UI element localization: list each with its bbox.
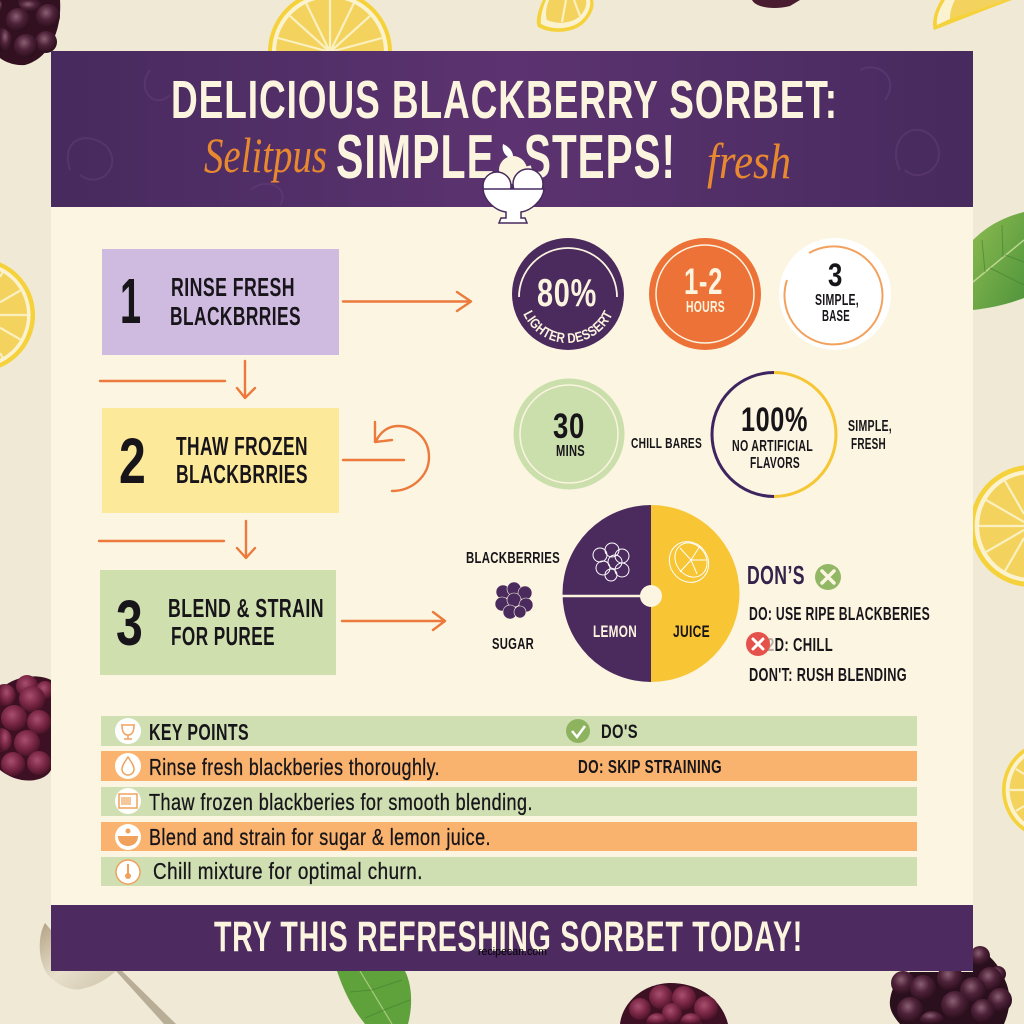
step 1 text line 1: RINSE FRESH	[171, 272, 295, 302]
step 3 text line 1: BLEND & STRAIN	[168, 593, 324, 623]
label: lemon: LEMON	[593, 622, 637, 641]
step 3	[100, 570, 336, 675]
stat: 80 percent: 80%	[537, 272, 597, 315]
label: juice: JUICE	[673, 622, 710, 641]
stat: 3 simple base: 3	[828, 257, 843, 293]
pie chart	[562, 505, 740, 682]
stat: 1-2 hours: 1-2	[684, 261, 723, 302]
arrow: step 1 down	[100, 361, 255, 398]
stat: 80 percent	[512, 238, 624, 350]
row: rinse	[101, 751, 917, 781]
stat: 1-2 hours	[649, 238, 761, 350]
stat: 3 simple base	[779, 238, 891, 350]
decoration: bottom blackberry	[620, 983, 728, 1024]
decoration: top right lemon wedge	[933, 0, 1012, 30]
stat: 100 percent: FLAVORS	[750, 455, 800, 472]
row: key points header: KEY POINTS	[149, 719, 249, 745]
label: sugar: SUGAR	[492, 636, 534, 653]
stat: 30 mins: MINS	[556, 443, 585, 460]
row: blend	[101, 822, 917, 851]
script word right: fresh	[707, 133, 791, 189]
row: rinse: Rinse fresh blackberies thoroughly.	[149, 754, 440, 780]
step 2	[102, 408, 339, 513]
icon: green cross	[815, 564, 841, 590]
icon: lemon outline	[661, 534, 717, 590]
label: simple fresh: FRESH	[851, 436, 886, 453]
step 1 number: 1	[120, 265, 142, 337]
stat: 1-2 hours: HOURS	[686, 299, 725, 316]
decoration: top lemon slice	[268, 0, 392, 52]
icon: blackberry	[495, 582, 533, 619]
item 2: 2D: CHILL	[767, 635, 833, 655]
decoration: lower right lemon slice	[1002, 749, 1024, 831]
decoration: left lemon slice	[0, 262, 35, 368]
script word left: Selitpus	[204, 127, 327, 183]
row: rinse: DO: SKIP STRAINING	[578, 757, 722, 777]
decoration: top blackberry	[752, 0, 800, 8]
row: thaw	[101, 787, 917, 816]
decoration: right mint leaf	[973, 212, 1024, 310]
icon: sorbet bowl	[483, 144, 544, 223]
heading: DON’S	[747, 560, 805, 590]
stat: 80 percent: LIGHTER DESSERT	[523, 310, 612, 343]
step 3 number: 3	[116, 587, 144, 659]
step 1 text line 2: BLACKBRRIES	[170, 301, 301, 331]
item 1: DO: USE RIPE BLACKBERIES	[749, 604, 930, 624]
stat: 30 mins	[514, 378, 624, 490]
don'ts panel	[746, 560, 930, 685]
decoration: bottom mint leaf	[337, 971, 411, 1024]
key points list	[101, 716, 917, 886]
step 2 text line 2: BLACKBRRIES	[176, 459, 308, 489]
arrow: step 2 loop	[343, 422, 429, 491]
stat: 30 mins: 30	[553, 407, 585, 446]
decoration: top left blackberry	[0, 0, 60, 65]
icon: red cross	[746, 632, 770, 656]
decoration: bottom right blackberry	[890, 946, 1012, 1024]
decoration: spoon	[40, 923, 176, 1024]
label: chill bares: CHILL BARES	[631, 435, 702, 452]
row: key points header	[101, 716, 917, 746]
title line 2 right: STEPS!	[524, 123, 676, 192]
arrow: step 1 to stats	[343, 292, 471, 311]
stat: 100 percent	[712, 372, 836, 496]
step 2 text line 1: THAW FROZEN	[176, 431, 308, 461]
row: blend: Blend and strain for sugar & lemon juice.	[149, 824, 491, 850]
decoration: left blackberry	[0, 675, 54, 781]
footer band	[51, 905, 973, 971]
stat: 100 percent: 100%	[741, 401, 808, 439]
arrow: step 3 to chart	[342, 612, 445, 630]
watermark: recipecan.com	[478, 946, 547, 958]
icon: berry outline	[593, 543, 629, 581]
title line 2 left: SIMPLE	[336, 123, 495, 192]
stat: 100 percent: NO ARTIFICIAL	[732, 438, 813, 455]
header band	[51, 51, 973, 207]
stat: 3 simple base: SIMPLE,	[815, 292, 859, 309]
label: blackberries: BLACKBERRIES	[466, 550, 560, 567]
step 2 number: 2	[119, 425, 147, 497]
step 3 text line 2: FOR PUREE	[171, 621, 275, 651]
row: chill: Chill mixture for optimal churn.	[153, 858, 423, 884]
row: key points header: DO'S	[601, 722, 638, 743]
step 1	[102, 249, 339, 355]
item 3: DON'T: RUSH BLENDING	[749, 665, 907, 685]
label: simple fresh	[848, 418, 892, 453]
row: thaw: Thaw frozen blackberies for smooth blending.	[149, 789, 533, 815]
decoration: top lemon wedge	[537, 0, 594, 32]
arrow: step 2 down	[99, 521, 255, 558]
stat: 3 simple base: BASE	[822, 308, 850, 325]
label: simple fresh: SIMPLE,	[848, 418, 892, 435]
decoration: right lemon slice	[970, 465, 1024, 587]
row: chill	[101, 857, 917, 886]
